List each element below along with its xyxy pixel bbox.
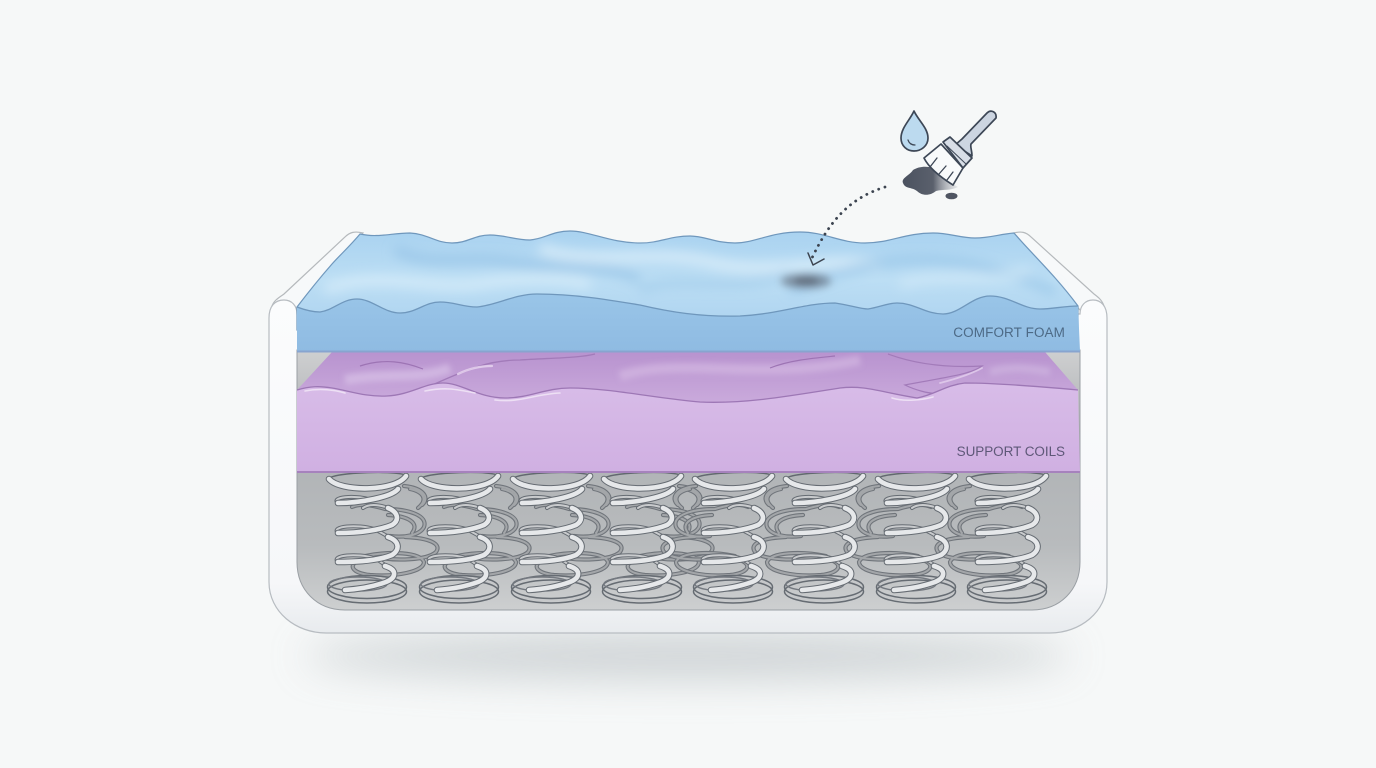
stain on foam — [781, 274, 831, 288]
soft floor shadow — [303, 632, 1073, 680]
label: support coils: SUPPORT COILS — [957, 444, 1065, 459]
left back rail — [272, 232, 363, 320]
support layer front face — [297, 383, 1080, 472]
foam top surface — [297, 231, 1078, 330]
support coils — [328, 472, 1046, 603]
icon: stain blob — [903, 167, 958, 199]
tray body — [269, 300, 1107, 633]
icon: paint brush — [924, 111, 996, 185]
white tray frame — [269, 232, 1107, 633]
icon: water drop — [901, 111, 928, 151]
comfort foam layer — [297, 231, 1080, 352]
front row coils — [328, 472, 1046, 603]
support layer — [297, 352, 1080, 473]
support layer top surface — [297, 352, 1078, 412]
label: comfort foam: COMFORT FOAM — [953, 325, 1065, 340]
coil cavity — [297, 350, 1080, 610]
dotted arrow to stain — [808, 187, 885, 265]
right back rail — [1014, 232, 1104, 320]
foam front face — [297, 294, 1080, 351]
back row coils — [352, 486, 1022, 575]
